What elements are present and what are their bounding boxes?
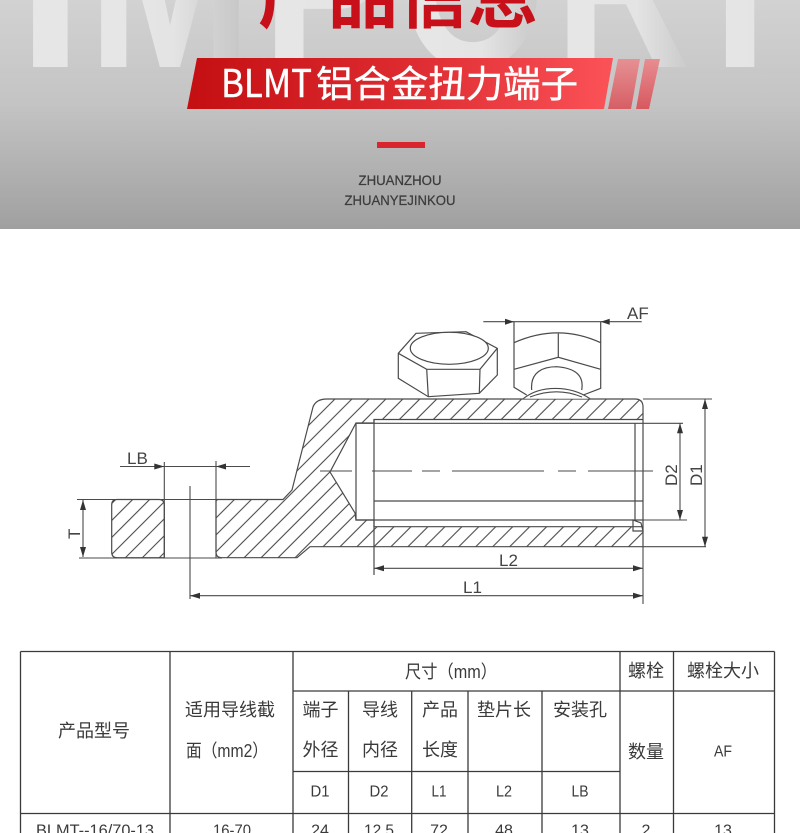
table header text: L1 xyxy=(432,784,447,800)
table header text: 安装孔 xyxy=(553,700,607,720)
bore lines xyxy=(320,419,653,575)
table header text: 数量 xyxy=(628,742,664,762)
dimension labels: T xyxy=(65,529,84,539)
table header text: 产品型号 xyxy=(58,721,130,741)
hatched flange block xyxy=(112,500,164,558)
table header text: 内径 xyxy=(362,740,398,760)
table first data row xyxy=(36,822,732,833)
header background xyxy=(0,0,800,229)
table header text: 产品 xyxy=(422,700,458,720)
dimension labels: L1 xyxy=(463,578,482,597)
watermark word xyxy=(33,0,754,67)
dimension arrowheads xyxy=(80,319,708,599)
banner: red parallelogram with product name: BLMT xyxy=(221,53,312,108)
table header text: 垫片长 xyxy=(477,700,531,720)
table header text xyxy=(58,661,759,800)
subtitle text xyxy=(344,172,456,208)
dimension labels: LB xyxy=(127,449,148,468)
banner: red parallelogram with product name: 铝合金扭力端子 xyxy=(316,54,578,108)
table header text: 外径 xyxy=(302,740,338,760)
table header text: AF xyxy=(714,744,732,760)
table header text: 螺栓 xyxy=(628,661,664,681)
table header text: LB xyxy=(572,784,588,800)
hatched terminal body xyxy=(216,399,643,558)
dimension lines xyxy=(77,322,712,604)
red dash xyxy=(377,142,425,148)
subtitle text: ZHUANZHOU xyxy=(358,172,442,188)
table header text: D2 xyxy=(370,784,389,800)
table header text: 长度 xyxy=(422,740,458,760)
table header text: 面（mm2） xyxy=(186,741,268,761)
dimension labels: D2 xyxy=(662,464,681,486)
table header text: D1 xyxy=(310,784,330,800)
table grid xyxy=(20,652,774,833)
table header text: 适用导线截 xyxy=(185,700,275,720)
dimension labels: D1 xyxy=(687,464,706,486)
table header text: 导线 xyxy=(362,700,398,720)
icon: bolt side view xyxy=(514,322,601,399)
table header text: 螺栓大小 xyxy=(687,661,759,681)
dimension labels: L2 xyxy=(499,551,518,570)
technical drawing: terminal section xyxy=(65,304,712,604)
table header text: 端子 xyxy=(302,700,338,720)
icon: hex nut top view xyxy=(398,332,497,397)
dimension labels xyxy=(65,304,706,597)
banner: red parallelogram with product name xyxy=(187,53,660,109)
dimension labels: AF xyxy=(627,304,649,323)
specification table xyxy=(20,652,774,833)
subtitle text: ZHUANYEJINKOU xyxy=(344,192,456,208)
table header text: L2 xyxy=(496,784,512,800)
table header text: 尺寸（mm） xyxy=(405,662,497,682)
